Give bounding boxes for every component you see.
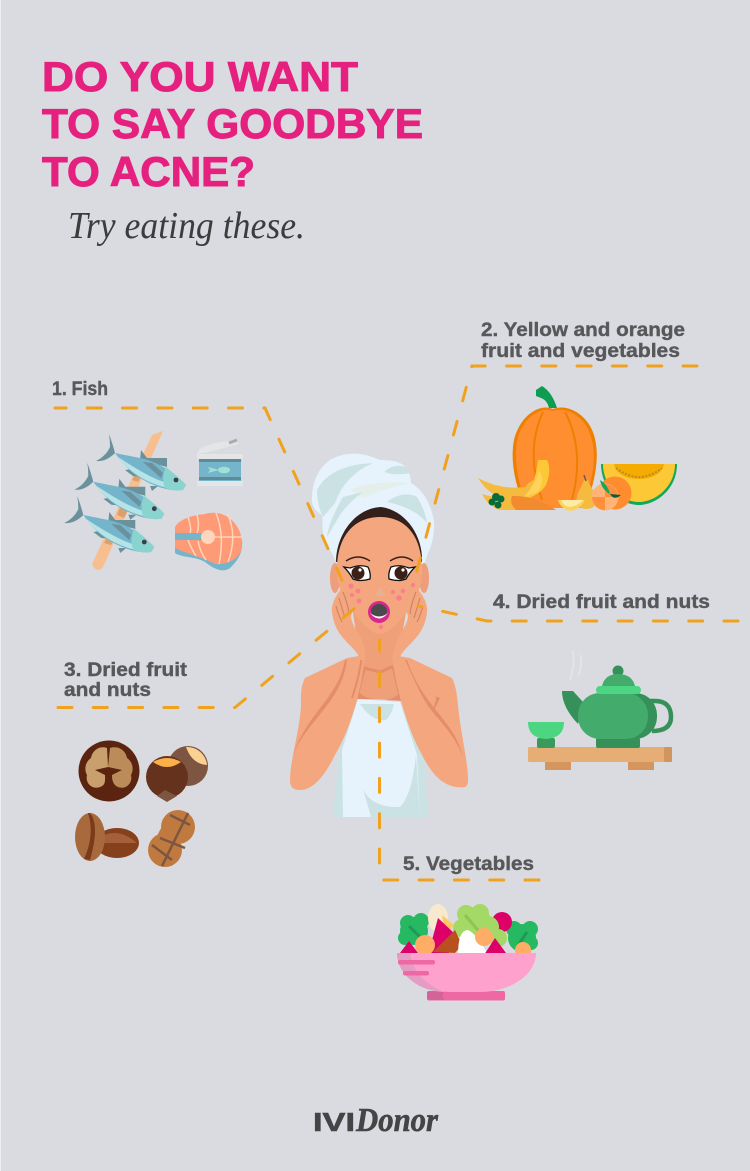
subtitle script: Try eating these.	[68, 205, 305, 247]
carrot	[511, 496, 556, 510]
right hand	[394, 589, 427, 660]
eyes	[344, 557, 415, 580]
neck and chest	[350, 606, 408, 701]
skewer	[92, 431, 163, 570]
broccoli	[488, 493, 504, 508]
label: dried fruit and nuts left: 3. Dried fruit	[64, 660, 188, 681]
label: yellow and orange: 2. Yellow and orange	[481, 320, 685, 341]
bananas	[482, 494, 530, 510]
apple slice	[558, 500, 585, 511]
title	[42, 53, 423, 195]
melon slice	[601, 464, 677, 505]
logo: Donor	[355, 1102, 439, 1139]
icon: teapot on tray	[528, 651, 672, 770]
left hand	[332, 589, 365, 660]
head towel	[312, 454, 434, 570]
nose	[375, 587, 385, 596]
title: DO YOU WANT	[42, 53, 358, 100]
logo: IVI	[313, 1107, 355, 1137]
label: dried fruit and nuts left	[64, 660, 188, 701]
acne spots	[348, 583, 415, 629]
pear	[577, 480, 598, 509]
icon: tin can	[197, 440, 243, 486]
title: TO ACNE?	[42, 148, 255, 195]
pumpkin	[513, 407, 597, 508]
icon: salmon steak	[175, 513, 242, 570]
mouth	[368, 601, 390, 623]
label: dried fruit and nuts left: and nuts	[64, 680, 151, 701]
title: TO SAY GOODBYE	[42, 100, 423, 147]
label: dried fruit and nuts right: 4. Dried fruit and nuts	[493, 592, 710, 613]
logo	[313, 1102, 439, 1139]
label: yellow and orange	[481, 320, 685, 362]
icon: fish group	[64, 431, 186, 570]
body towel	[333, 699, 428, 817]
orange	[598, 476, 632, 510]
dashed connectors	[55, 366, 738, 880]
right arm	[392, 655, 468, 787]
icon: salad bowl	[397, 904, 538, 1000]
face and hair	[330, 507, 429, 634]
panel: woman with acne	[290, 454, 468, 817]
label: yellow and orange: fruit and vegetables	[481, 341, 680, 362]
label: vegetables: 5. Vegetables	[403, 854, 534, 875]
left arm	[290, 654, 365, 790]
icon: pumpkin and fruit	[478, 386, 677, 511]
icon: nuts	[75, 740, 208, 867]
label: fish: 1. Fish	[52, 379, 108, 400]
